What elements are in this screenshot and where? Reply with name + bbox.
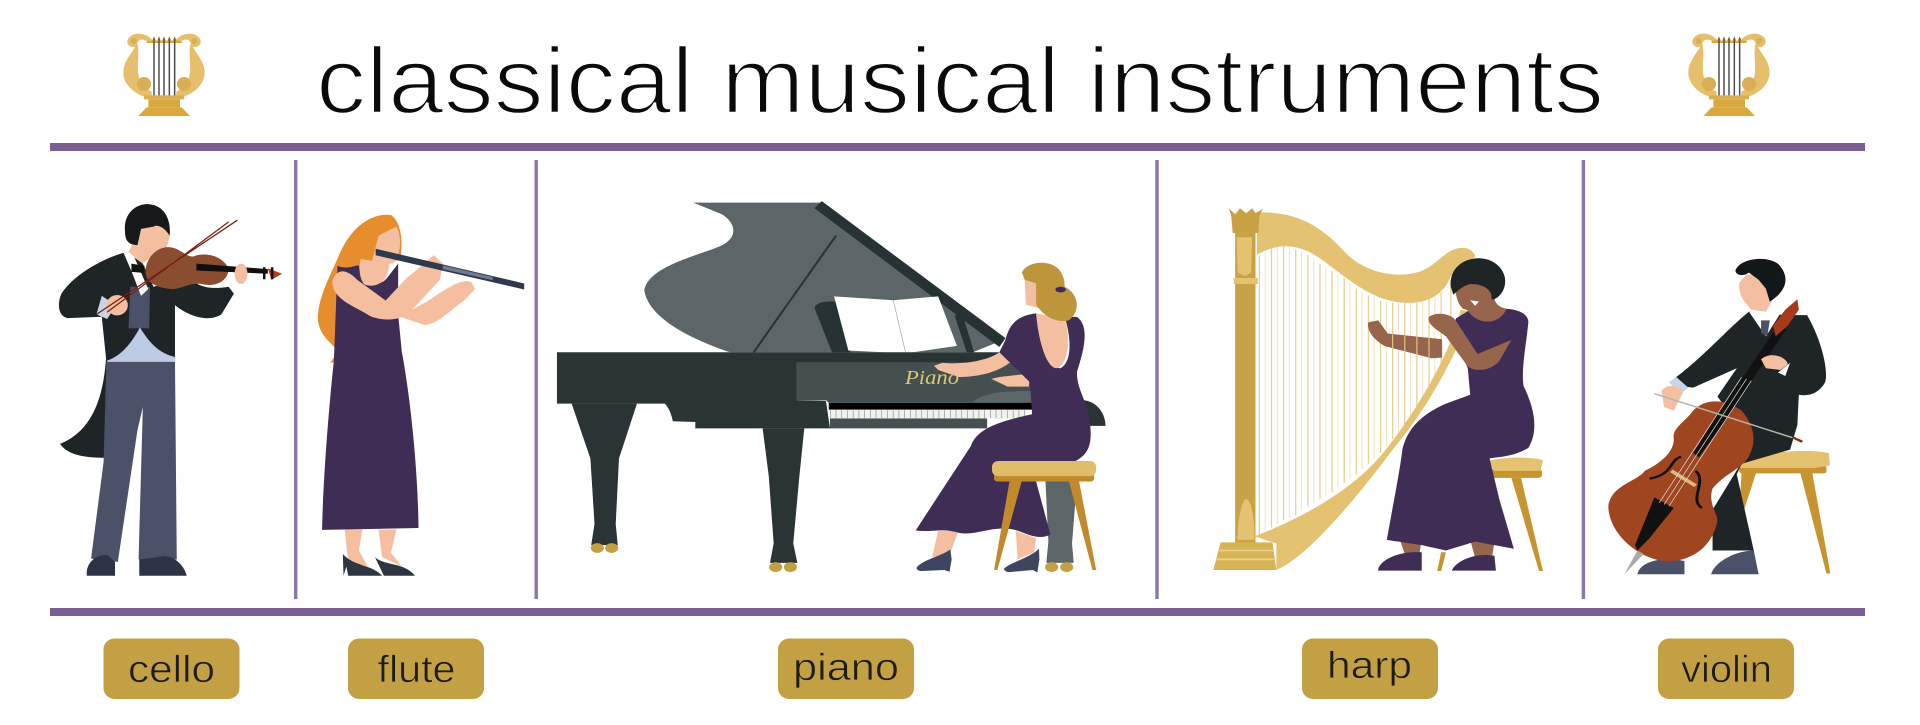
panel: harp and harpist	[1213, 208, 1543, 571]
label: violin	[1658, 638, 1794, 699]
harpist head	[1451, 258, 1507, 322]
cellist legs	[1713, 443, 1790, 550]
pianist arms	[934, 352, 1030, 387]
harp base	[1213, 542, 1276, 570]
label: flute	[348, 638, 484, 699]
tailcoat	[59, 252, 234, 458]
bow hand	[1662, 377, 1688, 411]
harp column	[1229, 208, 1263, 543]
face and arms	[332, 227, 475, 325]
label: piano	[778, 638, 914, 699]
piano logo: Piano	[904, 367, 959, 389]
piano case	[557, 352, 1003, 428]
piano lid	[644, 203, 1003, 352]
harp strings	[1259, 244, 1451, 535]
cello fittings	[1624, 377, 1751, 574]
cello body	[1608, 401, 1754, 561]
cellist jacket	[1674, 312, 1826, 451]
harp stool	[1437, 458, 1543, 571]
piano stool	[992, 461, 1096, 570]
label: cello: cello	[128, 649, 215, 691]
dress	[322, 264, 419, 530]
harpist dress	[1387, 309, 1534, 550]
title: classical musical instruments	[316, 28, 1604, 133]
icon: right lyre	[1688, 34, 1770, 116]
label: violin: violin	[1681, 649, 1772, 691]
shoes	[87, 555, 187, 576]
head	[125, 204, 170, 264]
heels	[343, 554, 415, 576]
sheet music	[834, 296, 957, 353]
stool	[1739, 451, 1830, 574]
pianist back and head	[1022, 263, 1077, 368]
legs	[345, 529, 402, 566]
harpist arms	[1368, 314, 1511, 370]
cellist head	[1735, 259, 1785, 312]
hair	[318, 215, 402, 363]
music desk	[814, 302, 850, 352]
panel: cellist	[1608, 259, 1830, 574]
bow hand	[96, 295, 128, 319]
icon: left lyre	[123, 34, 205, 116]
cellist shoes	[1637, 550, 1759, 574]
harp soundboard	[1255, 310, 1473, 570]
panel: flutist	[318, 215, 524, 576]
label: flute: flute	[378, 649, 456, 691]
harp neck	[1257, 212, 1475, 303]
harpist ankles and shoes	[1378, 540, 1496, 571]
trousers	[91, 362, 177, 562]
label: harp	[1302, 638, 1438, 699]
label: piano: piano	[793, 647, 899, 689]
shirt and tie	[1749, 312, 1780, 336]
string overlay on arm	[1393, 335, 1429, 358]
brass feet	[591, 543, 1073, 572]
panel: piano and pianist	[557, 201, 1106, 572]
pianist legs and shoes	[917, 531, 1039, 572]
pianist dress	[916, 313, 1091, 537]
cello neck and scroll	[1693, 299, 1799, 457]
cello bow	[1654, 394, 1802, 442]
violin	[146, 247, 282, 289]
flute	[376, 249, 524, 289]
bow	[96, 220, 237, 314]
panel: violinist	[59, 204, 282, 576]
neck hand	[1761, 355, 1790, 376]
piano legs	[572, 404, 804, 563]
label: harp: harp	[1327, 645, 1412, 687]
keyboard	[829, 403, 1032, 428]
vest and shirt	[107, 251, 175, 361]
label: cello	[104, 638, 240, 699]
